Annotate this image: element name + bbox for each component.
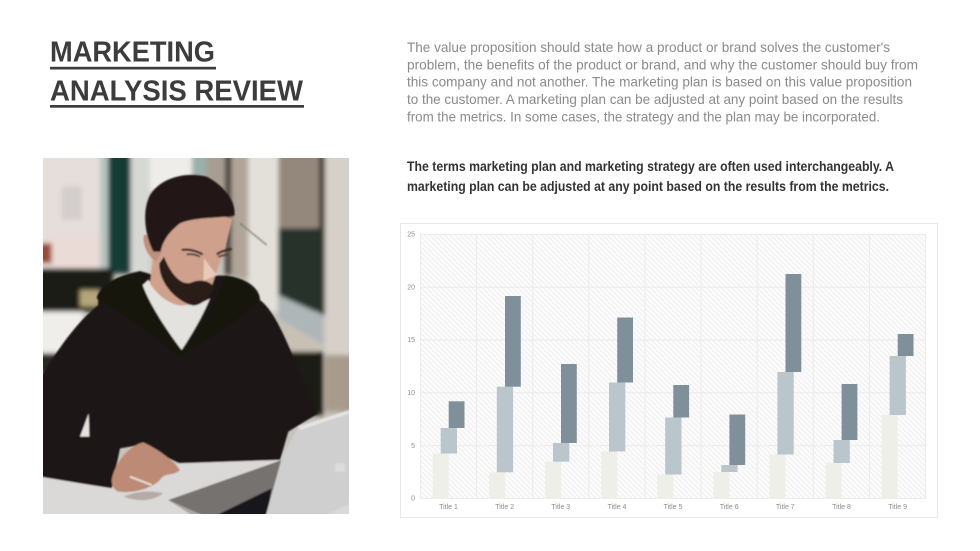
text block: bold statement: [407, 159, 894, 194]
y axis labels: [407, 232, 415, 503]
eyes: [182, 249, 232, 254]
x axis labels: Title 3: [551, 504, 570, 511]
y axis labels: 15: [407, 337, 415, 344]
text block: value proposition paragraph: [407, 40, 918, 124]
hand: [112, 442, 180, 492]
x axis labels: Title 9: [888, 504, 907, 511]
text block: bold statement: The terms marketing plan and marketing strategy are often used interchangeably. A: [407, 159, 894, 174]
title: [50, 37, 304, 108]
x axis labels: Title 4: [608, 504, 627, 511]
y axis labels: 0: [411, 496, 415, 503]
y axis labels: 10: [407, 390, 415, 397]
y axis labels: 5: [411, 443, 415, 450]
t-shirt: [143, 280, 210, 350]
x axis labels: Title 1: [439, 504, 458, 511]
photo: man working on a laptop: [43, 158, 349, 514]
beard: [159, 257, 214, 306]
sweatshirt: [30, 271, 318, 488]
laptop lid: [264, 413, 349, 514]
text block: value proposition paragraph: problem, the benefits of the product or brand, and why the customer should buy from: [407, 57, 918, 72]
text block: value proposition paragraph: from the metrics. In some cases, the strategy and the plan may be incorporated.: [407, 109, 880, 124]
plot area with hatched background: [420, 234, 926, 498]
x axis labels: Title 7: [776, 504, 795, 511]
x axis labels: Title 5: [664, 504, 683, 511]
laptop base: [168, 460, 282, 514]
bars: middle series: [441, 356, 906, 474]
x axis labels: Title 6: [720, 504, 739, 511]
text block: value proposition paragraph: to the customer. A marketing plan can be adjusted at any point based on the results: [407, 92, 903, 107]
y axis labels: 20: [407, 284, 415, 291]
text block: value proposition paragraph: The value proposition should state how a product or brand solves the customer's: [407, 40, 890, 55]
title: MARKETING: [50, 37, 215, 69]
bars: top series: [449, 274, 914, 465]
table: [30, 460, 367, 528]
bars: base series: [433, 415, 898, 498]
y axis labels: 25: [407, 232, 415, 238]
x axis labels: Title 2: [495, 504, 514, 511]
hair: [145, 175, 235, 252]
text block: value proposition paragraph: this company and not another. The marketing plan is based on this value proposition: [407, 75, 912, 90]
title: ANALYSIS REVIEW: [50, 76, 304, 108]
neck and face: [150, 208, 233, 306]
x axis labels: [439, 504, 907, 511]
chart panel: [400, 224, 938, 518]
text block: bold statement: marketing plan can be adjusted at any point based on the results from the metrics.: [407, 179, 889, 194]
x axis labels: Title 8: [832, 504, 851, 511]
